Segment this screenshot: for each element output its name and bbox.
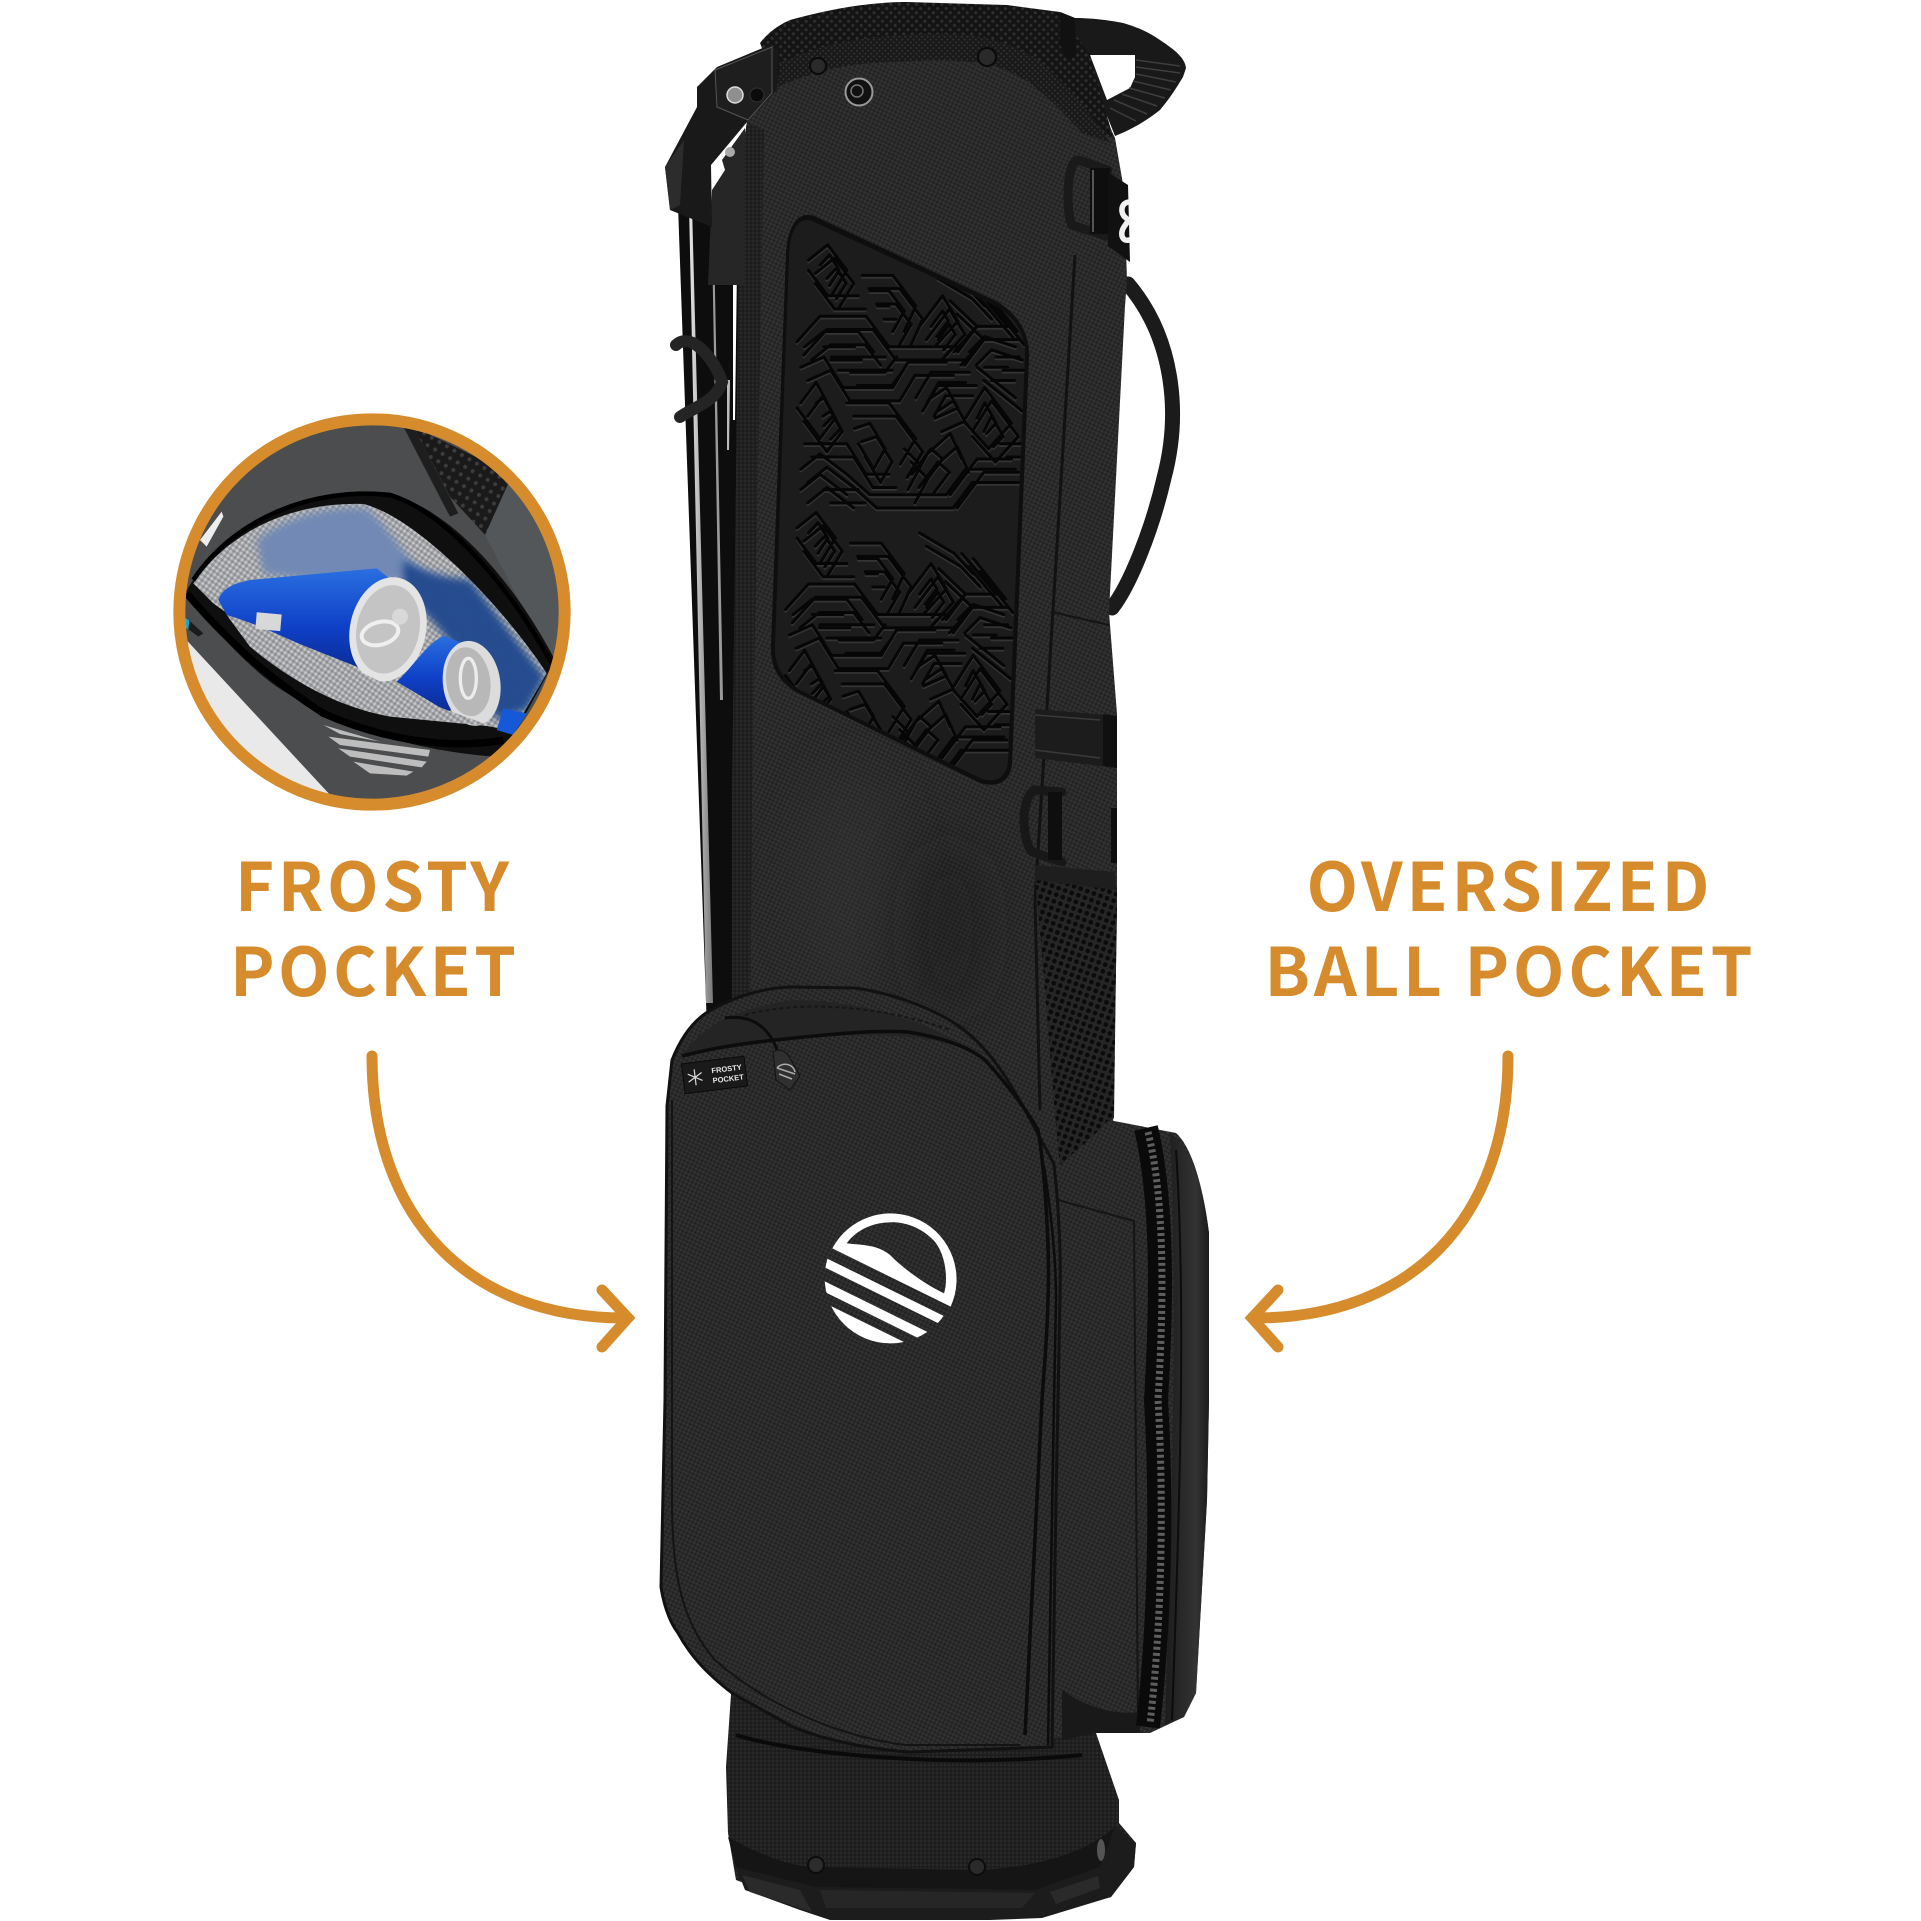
upper d-ring and strap xyxy=(1068,160,1130,262)
leg clip xyxy=(676,341,722,417)
top carry handle xyxy=(1060,12,1186,136)
collar binding band xyxy=(777,34,1110,143)
bracket rivet dark xyxy=(750,88,764,102)
brand logo xyxy=(824,1213,957,1344)
callout: frosty pocket inset photo xyxy=(170,410,577,817)
upper gusset zipper flap xyxy=(682,1000,985,1060)
bag body xyxy=(732,40,1127,1300)
cushioned back pad xyxy=(771,215,1030,785)
strap logo mark xyxy=(1122,202,1130,240)
heading line: BALL POCKET: BALL POCKET xyxy=(1264,919,1752,1016)
side double seam xyxy=(1044,1166,1056,1745)
frosty pocket tag xyxy=(681,1056,748,1094)
sole rivet right xyxy=(1097,1839,1105,1861)
arrow: frosty pocket xyxy=(372,1056,628,1347)
heading line: POCKET: POCKET xyxy=(230,919,516,1016)
collar xyxy=(760,2,1113,143)
sole rivet centre xyxy=(969,1859,985,1875)
ball pocket seam xyxy=(1058,1200,1138,1725)
stand legs xyxy=(678,205,740,1030)
side rope handle xyxy=(1112,284,1172,608)
heading line: OVERSIZED: OVERSIZED xyxy=(1306,834,1710,931)
tag text: FROSTY xyxy=(711,1063,742,1075)
heading line: FROSTY: FROSTY xyxy=(235,834,510,931)
tag text second line: POCKET xyxy=(712,1072,745,1085)
grommet xyxy=(846,78,872,106)
left body gusset xyxy=(732,122,764,1020)
collar rivet left xyxy=(810,58,826,74)
pad hex maze pattern xyxy=(786,245,1030,778)
handle ribbed grip xyxy=(1110,60,1180,121)
lower d-ring xyxy=(1024,790,1117,863)
ball pocket zipper xyxy=(1146,1128,1181,1727)
photo: pocket interior with cold cans xyxy=(185,425,559,799)
heading: oversized ball pocket xyxy=(1264,834,1752,1016)
stand bracket xyxy=(665,45,778,285)
logo sun arc and hill xyxy=(832,1213,957,1307)
snowflake icon xyxy=(687,1069,703,1086)
stitched seam line xyxy=(745,1007,950,1030)
ball pocket end panel xyxy=(1165,1133,1209,1725)
left edge seam xyxy=(672,1100,1020,1745)
golf bag xyxy=(661,2,1209,1920)
logo strap xyxy=(1108,172,1130,262)
oversized ball pocket xyxy=(1040,1120,1209,1740)
collar rivet right xyxy=(978,48,996,66)
zipper pull cord xyxy=(725,1017,778,1052)
frosty pocket xyxy=(661,987,1060,1752)
pivot bolt xyxy=(725,147,735,157)
body fabric folds xyxy=(800,255,1109,1110)
zipper pull xyxy=(773,1050,800,1090)
logo stripes xyxy=(824,1258,944,1344)
mesh side pocket xyxy=(1035,865,1117,1165)
base seam xyxy=(736,1735,1082,1760)
mid webbing strap xyxy=(1035,709,1117,768)
pocket zip seam xyxy=(682,1031,1048,1735)
bracket rivet silver xyxy=(727,87,743,103)
gold ring xyxy=(179,419,565,805)
handle sleeve xyxy=(1060,12,1076,60)
base skirt xyxy=(726,1680,1136,1920)
stitched lower band xyxy=(728,1827,1115,1890)
sole rivet left xyxy=(808,1857,824,1873)
arrow: oversized ball pocket xyxy=(1252,1056,1508,1347)
heading: frosty pocket xyxy=(230,834,516,1016)
rubber sole xyxy=(736,1827,1136,1920)
ball pocket bottom crease xyxy=(1062,1690,1140,1740)
